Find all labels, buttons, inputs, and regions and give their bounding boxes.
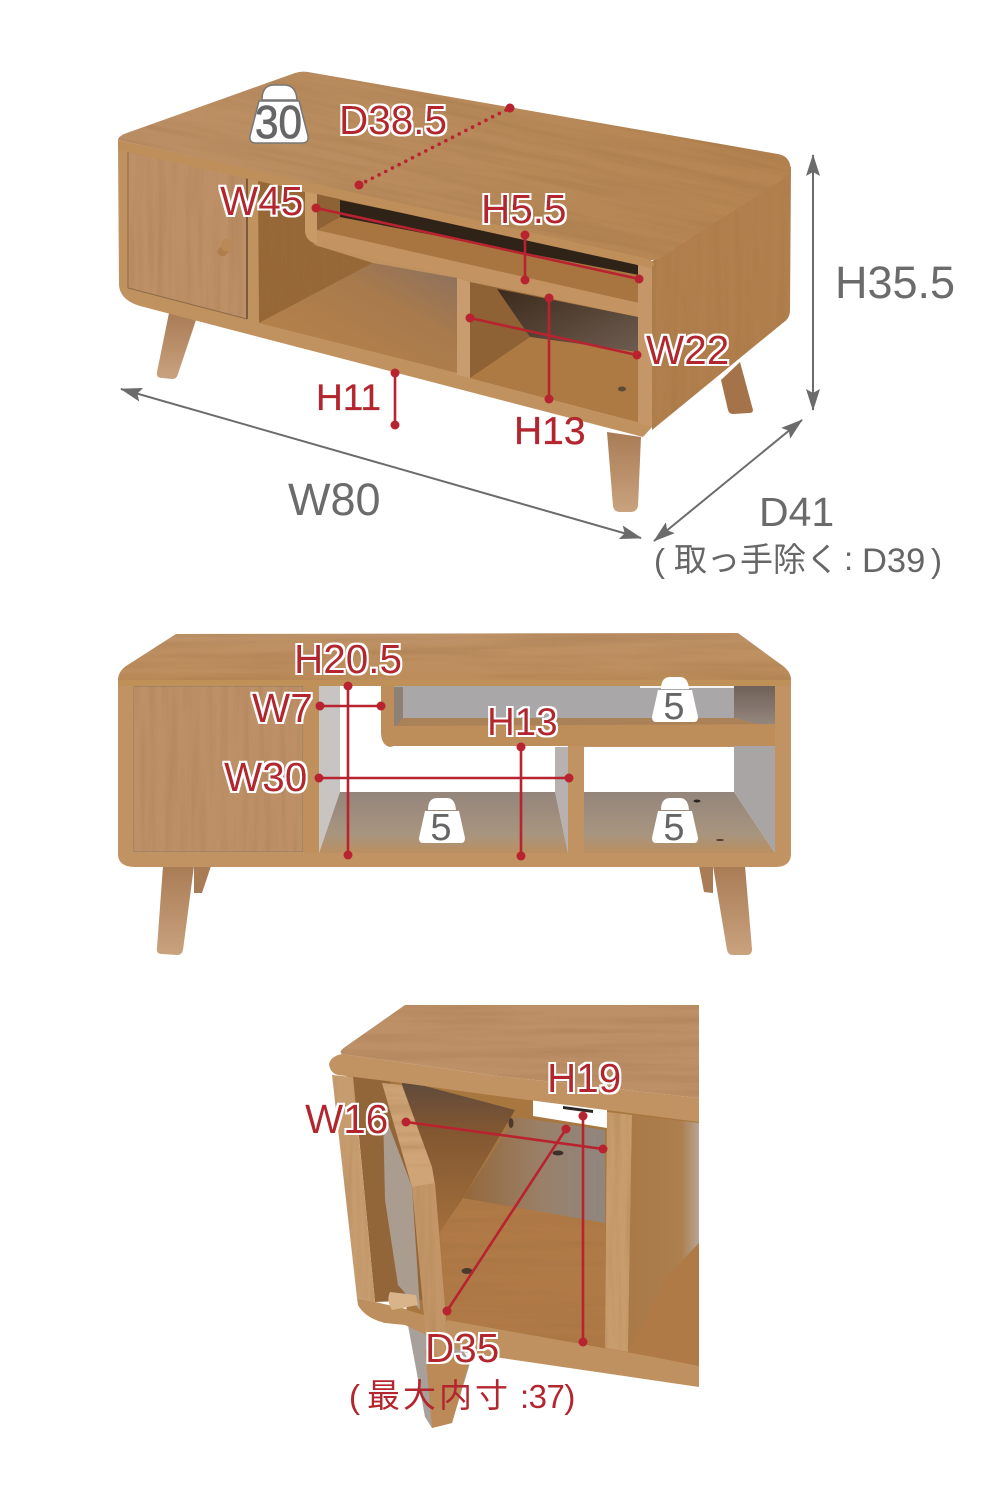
weight icon: 5 lower right: 5 [663,807,685,849]
dimension: H13 [487,701,558,860]
weight icon: 5 lower right [652,798,698,849]
dimension: H13: H13 [514,410,586,453]
dimension: W30 [224,754,574,800]
dimension: H11 [316,368,400,430]
dimension: H20.5 [294,636,402,860]
dimension: W22 [466,314,729,373]
weight icon: 5 upper shelf: 5 [663,686,685,728]
weight icon: 5 lower left [419,798,465,849]
label: W80: W80 [288,474,381,525]
furniture: table front photo [118,633,791,955]
dimension: H19: H19 [547,1055,621,1101]
dimension: H11: H11 [316,377,381,418]
label: maximum inner size: ( [349,1378,360,1415]
dimension: D35: D35 [425,1325,499,1371]
dimension: H19 [547,1055,621,1346]
label: depth excluding handle: : [844,540,853,577]
dimension: H20.5: H20.5 [294,636,402,682]
dimension: W7: W7 [252,685,313,731]
panel: angled view of table [118,72,954,579]
label: maximum inner size [349,1377,575,1415]
dimension: H5.5 [481,186,567,284]
dimension: D38.5: D38.5 [339,97,447,143]
panel: door-open detail view [305,1005,699,1428]
weight icon: 5 upper shelf [652,677,698,728]
weight icon: 5 lower left: 5 [430,807,452,849]
dimension: H5.5: H5.5 [481,186,567,232]
dimension: W16 [305,1096,608,1154]
label: maximum inner size: :37) [520,1378,575,1415]
label: depth excluding handle: ( [654,542,665,579]
dimension: D38.5 [339,97,514,190]
panel: front view of table [118,633,791,955]
arrow: overall width [121,389,641,538]
dimension: W16: W16 [305,1096,388,1142]
label: depth excluding handle: D39 [862,542,925,580]
arrow: overall depth [654,420,802,541]
label: maximum inner size: 最大内寸 [367,1377,511,1414]
furniture: open door photo [329,1005,699,1428]
dimension: H13: H13 [487,701,558,744]
label: H35.5: H35.5 [835,257,955,308]
dimension: W22: W22 [646,327,729,373]
furniture: table angled photo [24,0,894,512]
dimension: D35 [425,1124,570,1371]
label: depth excluding handle: 取っ手除く [674,541,839,578]
dimension: W30: W30 [224,754,307,800]
label: depth excluding handle [654,540,942,580]
dimension: W45 [220,178,644,284]
dimension: W45: W45 [220,178,303,224]
label: D41: D41 [759,489,834,535]
dimension: W7 [252,685,386,731]
arrow: overall height [812,155,814,410]
weight icon: 30: 30 [255,96,302,148]
label: depth excluding handle: ) [931,542,942,579]
dimension: H13 [514,294,586,453]
